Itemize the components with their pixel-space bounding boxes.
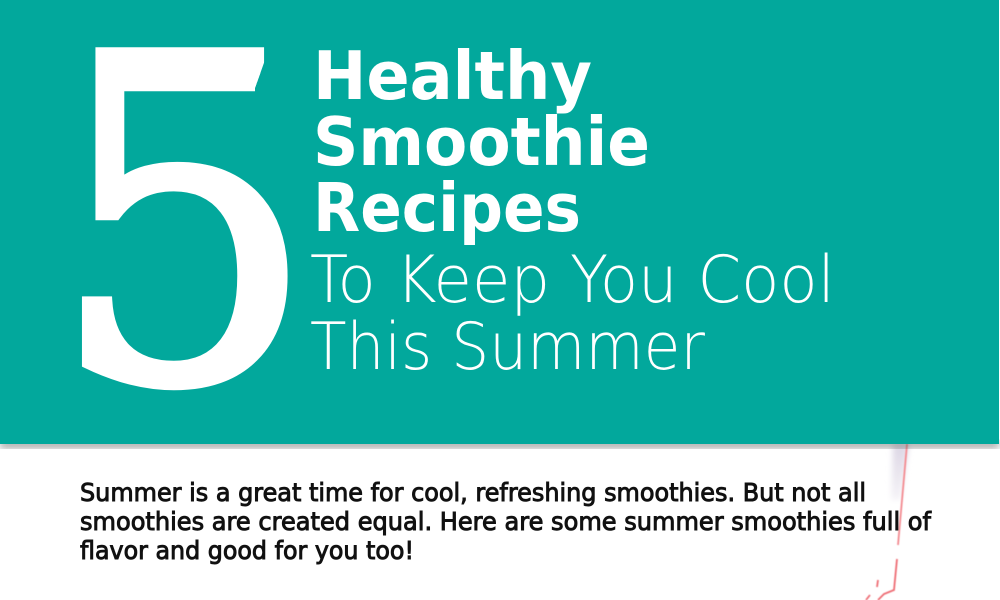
- title bold lines: Smoothie: [313, 103, 650, 181]
- title light lines: [310, 243, 835, 385]
- header shadow: [0, 440, 999, 448]
- title bold lines: Recipes: [313, 169, 581, 247]
- juice drip streak: [866, 444, 909, 600]
- title: [310, 37, 835, 385]
- title bold lines: Healthy: [313, 37, 592, 115]
- title light lines: This Summer: [310, 310, 705, 385]
- title bold lines: [313, 37, 650, 247]
- intro paragraph: smoothies are created equal. Here are some summer smoothies full of: [80, 507, 932, 536]
- title light lines: To Keep You Cool: [310, 243, 835, 318]
- intro paragraph: [80, 478, 932, 565]
- header panel: [0, 0, 999, 444]
- intro paragraph: Summer is a great time for cool, refreshing smoothies. But not all: [80, 478, 866, 507]
- intro paragraph: flavor and good for you too!: [80, 536, 414, 565]
